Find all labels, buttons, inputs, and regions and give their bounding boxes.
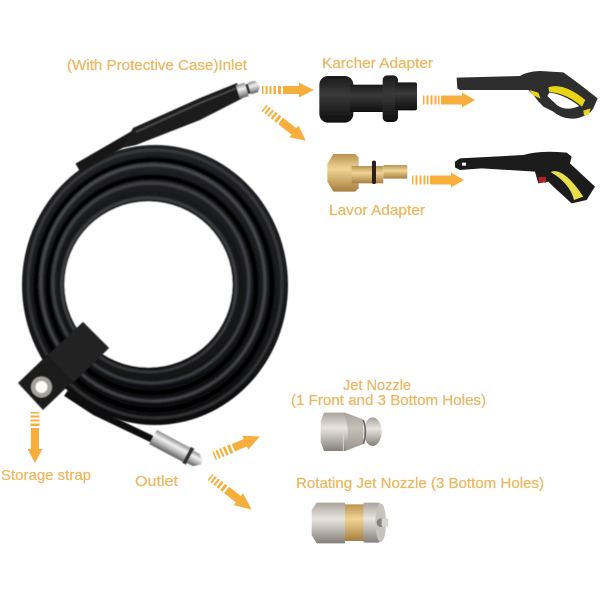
inlet metal connector bbox=[236, 79, 261, 99]
lavor adapter bbox=[327, 154, 407, 192]
arrow: lavor adapter to gun bbox=[412, 172, 464, 188]
yellow trigger bbox=[548, 86, 585, 107]
outlet label: Outlet bbox=[135, 473, 179, 490]
rotating jet nozzle bbox=[312, 503, 388, 543]
spray gun: lavor bbox=[455, 152, 595, 203]
rotating nozzle label: Rotating Jet Nozzle (3 Bottom Holes) bbox=[296, 475, 544, 492]
jet nozzle label: (1 Front and 3 Bottom Holes) bbox=[291, 392, 486, 409]
protective case bbox=[122, 83, 243, 148]
storage strap label: Storage strap bbox=[1, 467, 91, 484]
outlet hose end bbox=[66, 393, 206, 471]
karcher adapter label: Karcher Adapter bbox=[322, 55, 433, 72]
arrow: down to storage strap bbox=[28, 412, 42, 463]
lavor adapter label: Lavor Adapter bbox=[329, 202, 425, 219]
arrow: inlet to karcher adapter bbox=[262, 82, 314, 98]
jet nozzle label bbox=[291, 377, 486, 409]
yellow grip insert bbox=[551, 171, 583, 200]
red button bbox=[539, 177, 546, 183]
arrow: outlet to jet nozzle bbox=[211, 430, 263, 463]
jet nozzle bbox=[321, 413, 382, 451]
inlet hose end bbox=[78, 79, 261, 168]
outlet metal connector bbox=[149, 429, 206, 471]
storage strap bbox=[18, 322, 109, 410]
strap eyelet bbox=[31, 376, 52, 398]
coil inner opening bbox=[64, 202, 232, 368]
arrow: karcher adapter to gun bbox=[423, 92, 475, 108]
arrow: inlet to lavor adapter bbox=[259, 102, 310, 147]
brass collar bbox=[345, 504, 364, 541]
jet nozzle label: Jet Nozzle bbox=[343, 377, 411, 394]
hose coil bbox=[22, 145, 288, 425]
karcher adapter bbox=[319, 75, 417, 123]
inlet label: (With Protective Case)Inlet bbox=[67, 57, 248, 74]
spray gun: karcher bbox=[457, 71, 598, 119]
muzzle window bbox=[462, 163, 466, 166]
arrow: outlet to rotating nozzle bbox=[205, 471, 256, 516]
